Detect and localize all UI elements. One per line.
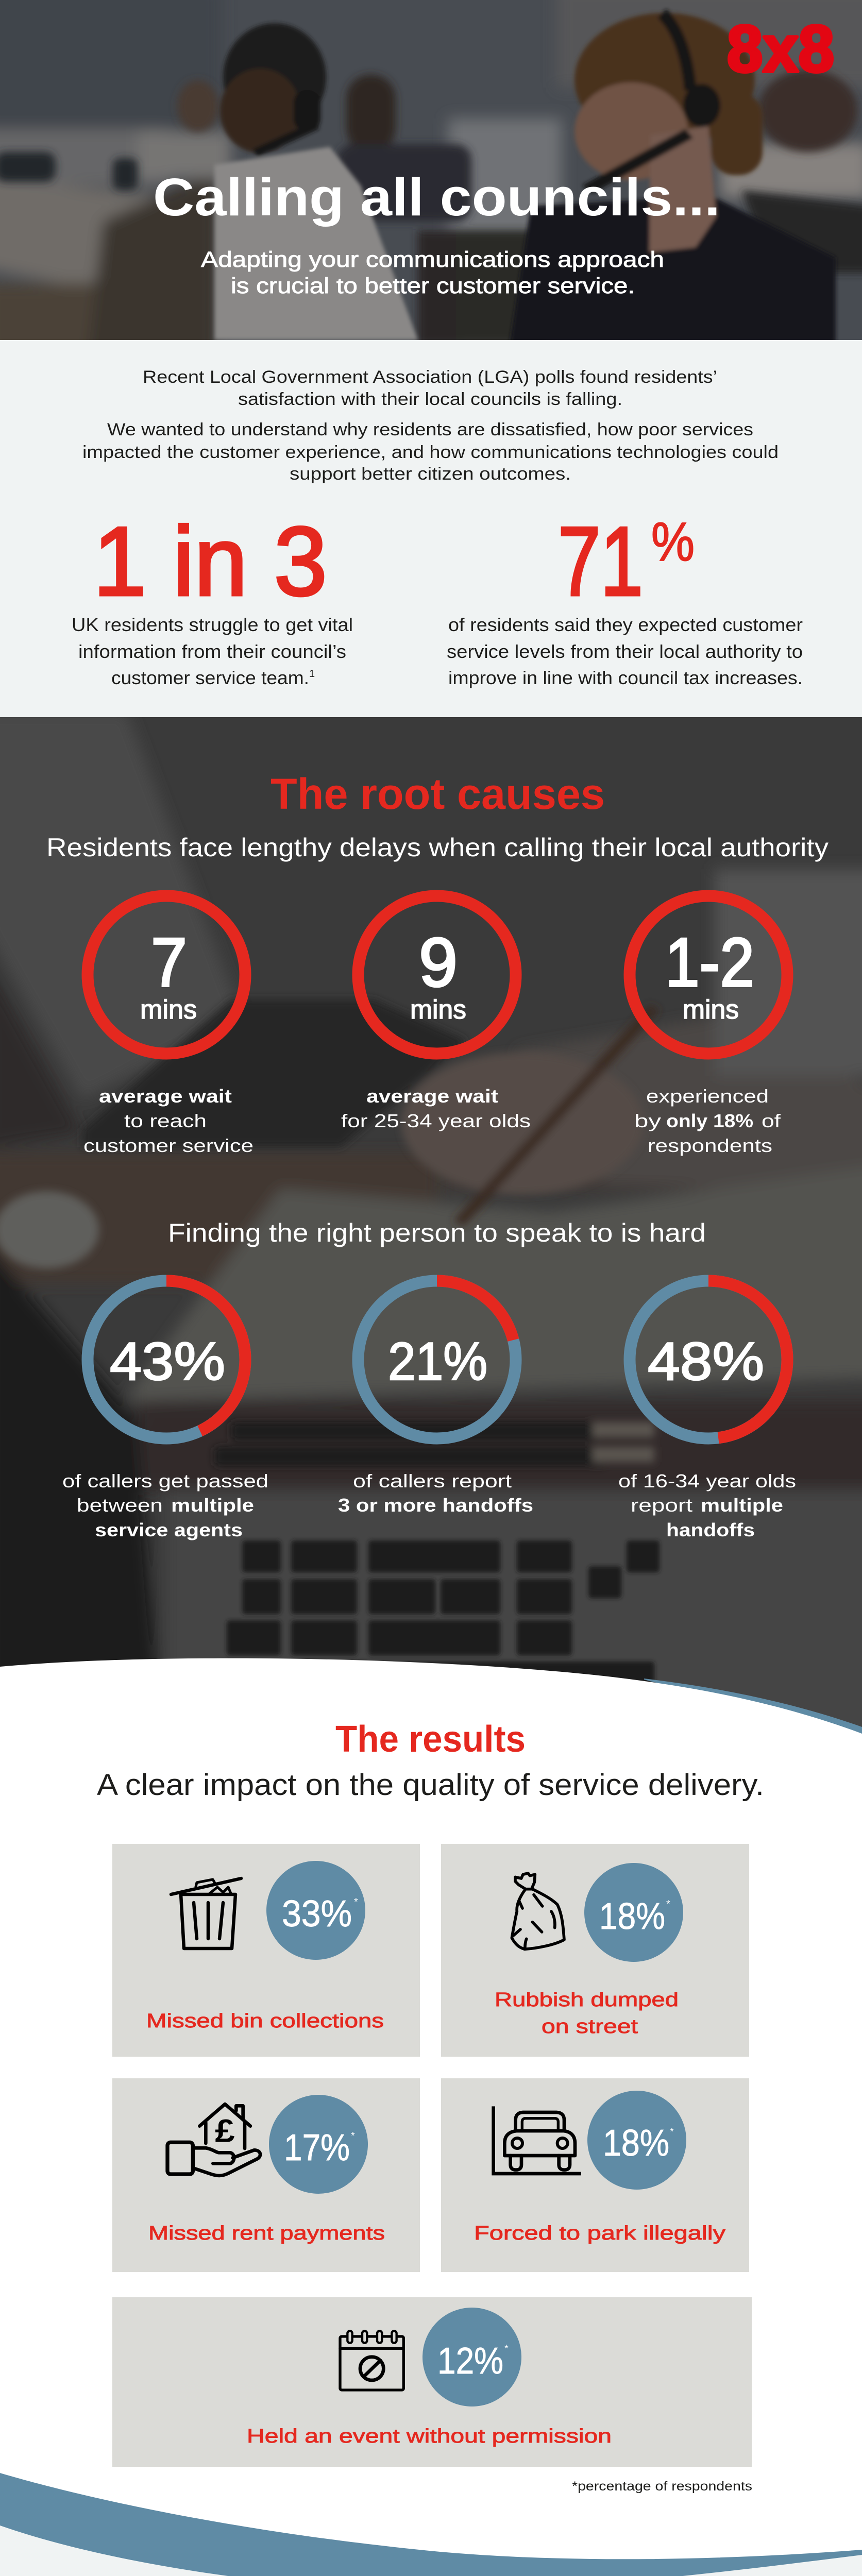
stat caption: 71%: improve in line with council tax increases. <box>448 667 803 688</box>
caption: average wait for 25-34 year olds: for 25-34 year olds <box>341 1110 531 1131</box>
caption: callers passed between agents <box>62 1470 268 1540</box>
panel: introduction <box>0 340 862 717</box>
caption: experienced by only 18%: respondents <box>648 1135 772 1156</box>
card: missed bin collections <box>112 1844 420 2057</box>
subheading: delays: Residents face lengthy delays when calling their local authority <box>46 833 829 862</box>
title: Calling all councils... <box>153 167 720 227</box>
card: forced to park illegally <box>441 2078 749 2272</box>
stat caption: 71% <box>447 614 803 688</box>
donut: 21%: 21% <box>388 1332 487 1392</box>
photo background: desk with laptop <box>0 711 862 1762</box>
icon: rubbish bag <box>512 1873 564 1949</box>
stat caption: 1 in 3: 1 <box>309 668 315 680</box>
badge: 17%: 17% <box>284 2127 350 2168</box>
label: on street <box>542 2016 638 2038</box>
stat ring: 1-2 mins: 1-2 <box>665 924 754 1001</box>
label: Held an event without permission <box>247 2426 612 2447</box>
badge: 18%: 18% <box>603 2123 669 2164</box>
caption: 3 or more handoffs: 3 or more handoffs <box>338 1495 533 1516</box>
caption: 3 or more handoffs: of callers report <box>353 1470 512 1492</box>
caption: experienced by only 18%: experienced <box>646 1086 769 1107</box>
donut: 48% <box>630 1281 787 1438</box>
subtitle: Adapting your communications approach <box>201 247 664 272</box>
badge: 12% <box>422 2308 521 2406</box>
stat ring: 9 mins: 9 <box>419 924 458 1001</box>
intro text: Recent Local Government Association (LGA) polls found residents’ <box>143 367 717 387</box>
icon: hand holding house: £ <box>215 2113 235 2149</box>
intro text: impacted the customer experience, and how communications technologies could <box>82 443 779 462</box>
icon: bin <box>171 1878 241 1948</box>
badge: 18% <box>584 1863 683 1962</box>
badge: 18%: * <box>670 2126 674 2138</box>
caption: 16-34 multiple handoffs: multiple <box>701 1495 783 1516</box>
icon: calendar <box>340 2331 403 2390</box>
stat ring: 7 mins: 7 <box>151 924 187 1001</box>
label: Missed bin collections <box>146 2010 384 2032</box>
panel: the results <box>0 1658 862 2494</box>
caption: 16-34 multiple handoffs <box>618 1470 796 1540</box>
caption: 16-34 multiple handoffs: of 16-34 year olds <box>618 1470 796 1492</box>
stat caption: 1 in 3 <box>72 614 353 688</box>
badge: 12%: 12% <box>437 2341 503 2382</box>
intro text: satisfaction with their local councils is falling. <box>238 389 622 409</box>
caption: 16-34 multiple handoffs: report <box>631 1495 692 1516</box>
stat caption: 1 in 3: customer service team. <box>111 667 309 688</box>
card: missed rent payments <box>112 2078 420 2272</box>
stat: 1 in 3: 1 in 3 <box>93 507 327 616</box>
panel: the way forward <box>0 2473 862 2576</box>
badge: 18%: * <box>666 1899 670 1910</box>
badge: 18%: 18% <box>599 1896 665 1937</box>
heading: The results <box>335 1719 526 1760</box>
stat ring: 9 mins <box>358 896 516 1054</box>
icon: parked car <box>494 2106 581 2174</box>
badge: 17% <box>269 2095 368 2194</box>
caption: callers passed between agents: service agents <box>95 1519 243 1540</box>
hero photo: call centre agents <box>0 0 862 355</box>
caption: average wait for 25-34 year olds: average wait <box>366 1086 498 1107</box>
panel: the root causes <box>0 717 862 1727</box>
stat ring: 9 mins: mins <box>410 995 466 1025</box>
caption: callers passed between agents: multiple <box>171 1495 254 1516</box>
stat ring: 7 mins: mins <box>140 995 197 1025</box>
donut: 43% <box>88 1281 245 1438</box>
stat ring: 1-2 mins: mins <box>683 995 739 1025</box>
stat caption: 1 in 3: UK residents struggle to get vital <box>72 614 353 635</box>
white curved section <box>0 1658 862 2576</box>
subtitle <box>201 247 664 298</box>
donut: 43%: 43% <box>110 1332 225 1392</box>
label <box>495 1989 679 2038</box>
footnote: *percentage of respondents <box>572 2479 752 2494</box>
caption: average wait to reach customer service: customer service <box>83 1135 253 1156</box>
donut: 21% <box>358 1281 516 1438</box>
stat ring: 7 mins <box>88 896 245 1054</box>
background <box>0 2526 862 2576</box>
stat: 1 in 3 <box>72 507 353 688</box>
caption: average wait for 25-34 year olds <box>341 1086 531 1131</box>
intro text: support better citizen outcomes. <box>290 464 571 484</box>
caption: experienced by only 18%: by <box>634 1110 661 1131</box>
subheading: A clear impact on the quality of service delivery. <box>97 1768 764 1802</box>
intro text <box>82 367 779 484</box>
logo: 8x8 top: 8x8 <box>727 12 834 86</box>
stat caption: 71%: of residents said they expected customer <box>448 614 803 635</box>
label: Rubbish dumped <box>495 1989 679 2011</box>
stat ring: 1-2 mins <box>630 896 787 1054</box>
stat: 71% <box>447 507 803 688</box>
badge: 12%: * <box>504 2343 509 2354</box>
card: held an event without permission <box>112 2297 752 2467</box>
badge: 17%: * <box>351 2130 355 2142</box>
intro text: We wanted to understand why residents are dissatisfied, how poor services <box>107 420 753 439</box>
badge: 33% <box>266 1861 365 1960</box>
stat: 71%: % <box>651 512 695 572</box>
badge: 18% <box>587 2091 686 2190</box>
caption: callers passed between agents: of callers get passed <box>62 1470 268 1492</box>
icon: hand holding house <box>167 2104 260 2176</box>
caption: 3 or more handoffs <box>338 1470 533 1516</box>
label: Missed rent payments <box>148 2223 385 2244</box>
subtitle: is crucial to better customer service. <box>231 274 635 298</box>
panel: hero <box>0 0 862 340</box>
stat: 71%: 71 <box>558 507 643 616</box>
caption: average wait to reach customer service <box>83 1086 253 1156</box>
caption: experienced by only 18%: only 18% <box>666 1110 753 1131</box>
caption: experienced by only 18% <box>634 1086 781 1156</box>
card: rubbish dumped on street <box>441 1844 749 2057</box>
label: Forced to park illegally <box>474 2223 725 2244</box>
curved blue band <box>0 2473 862 2576</box>
caption: average wait to reach customer service: average wait <box>99 1086 232 1107</box>
blue edge of wave <box>644 1679 862 1737</box>
caption: average wait to reach customer service: to reach <box>124 1110 207 1131</box>
stat caption: 1 in 3: information from their council’s <box>78 641 346 662</box>
stat caption: 71%: service levels from their local authority to <box>447 641 803 662</box>
heading: The root causes <box>271 770 605 818</box>
badge: 33%: 33% <box>282 1893 352 1935</box>
subheading: finding the right person: Finding the right person to speak to is hard <box>168 1218 706 1247</box>
caption: experienced by only 18%: of <box>762 1110 781 1131</box>
donut: 48%: 48% <box>648 1332 764 1392</box>
caption: 16-34 multiple handoffs: handoffs <box>666 1519 755 1540</box>
badge: 33%: * <box>354 1896 358 1908</box>
caption: callers passed between agents: between <box>77 1495 163 1516</box>
